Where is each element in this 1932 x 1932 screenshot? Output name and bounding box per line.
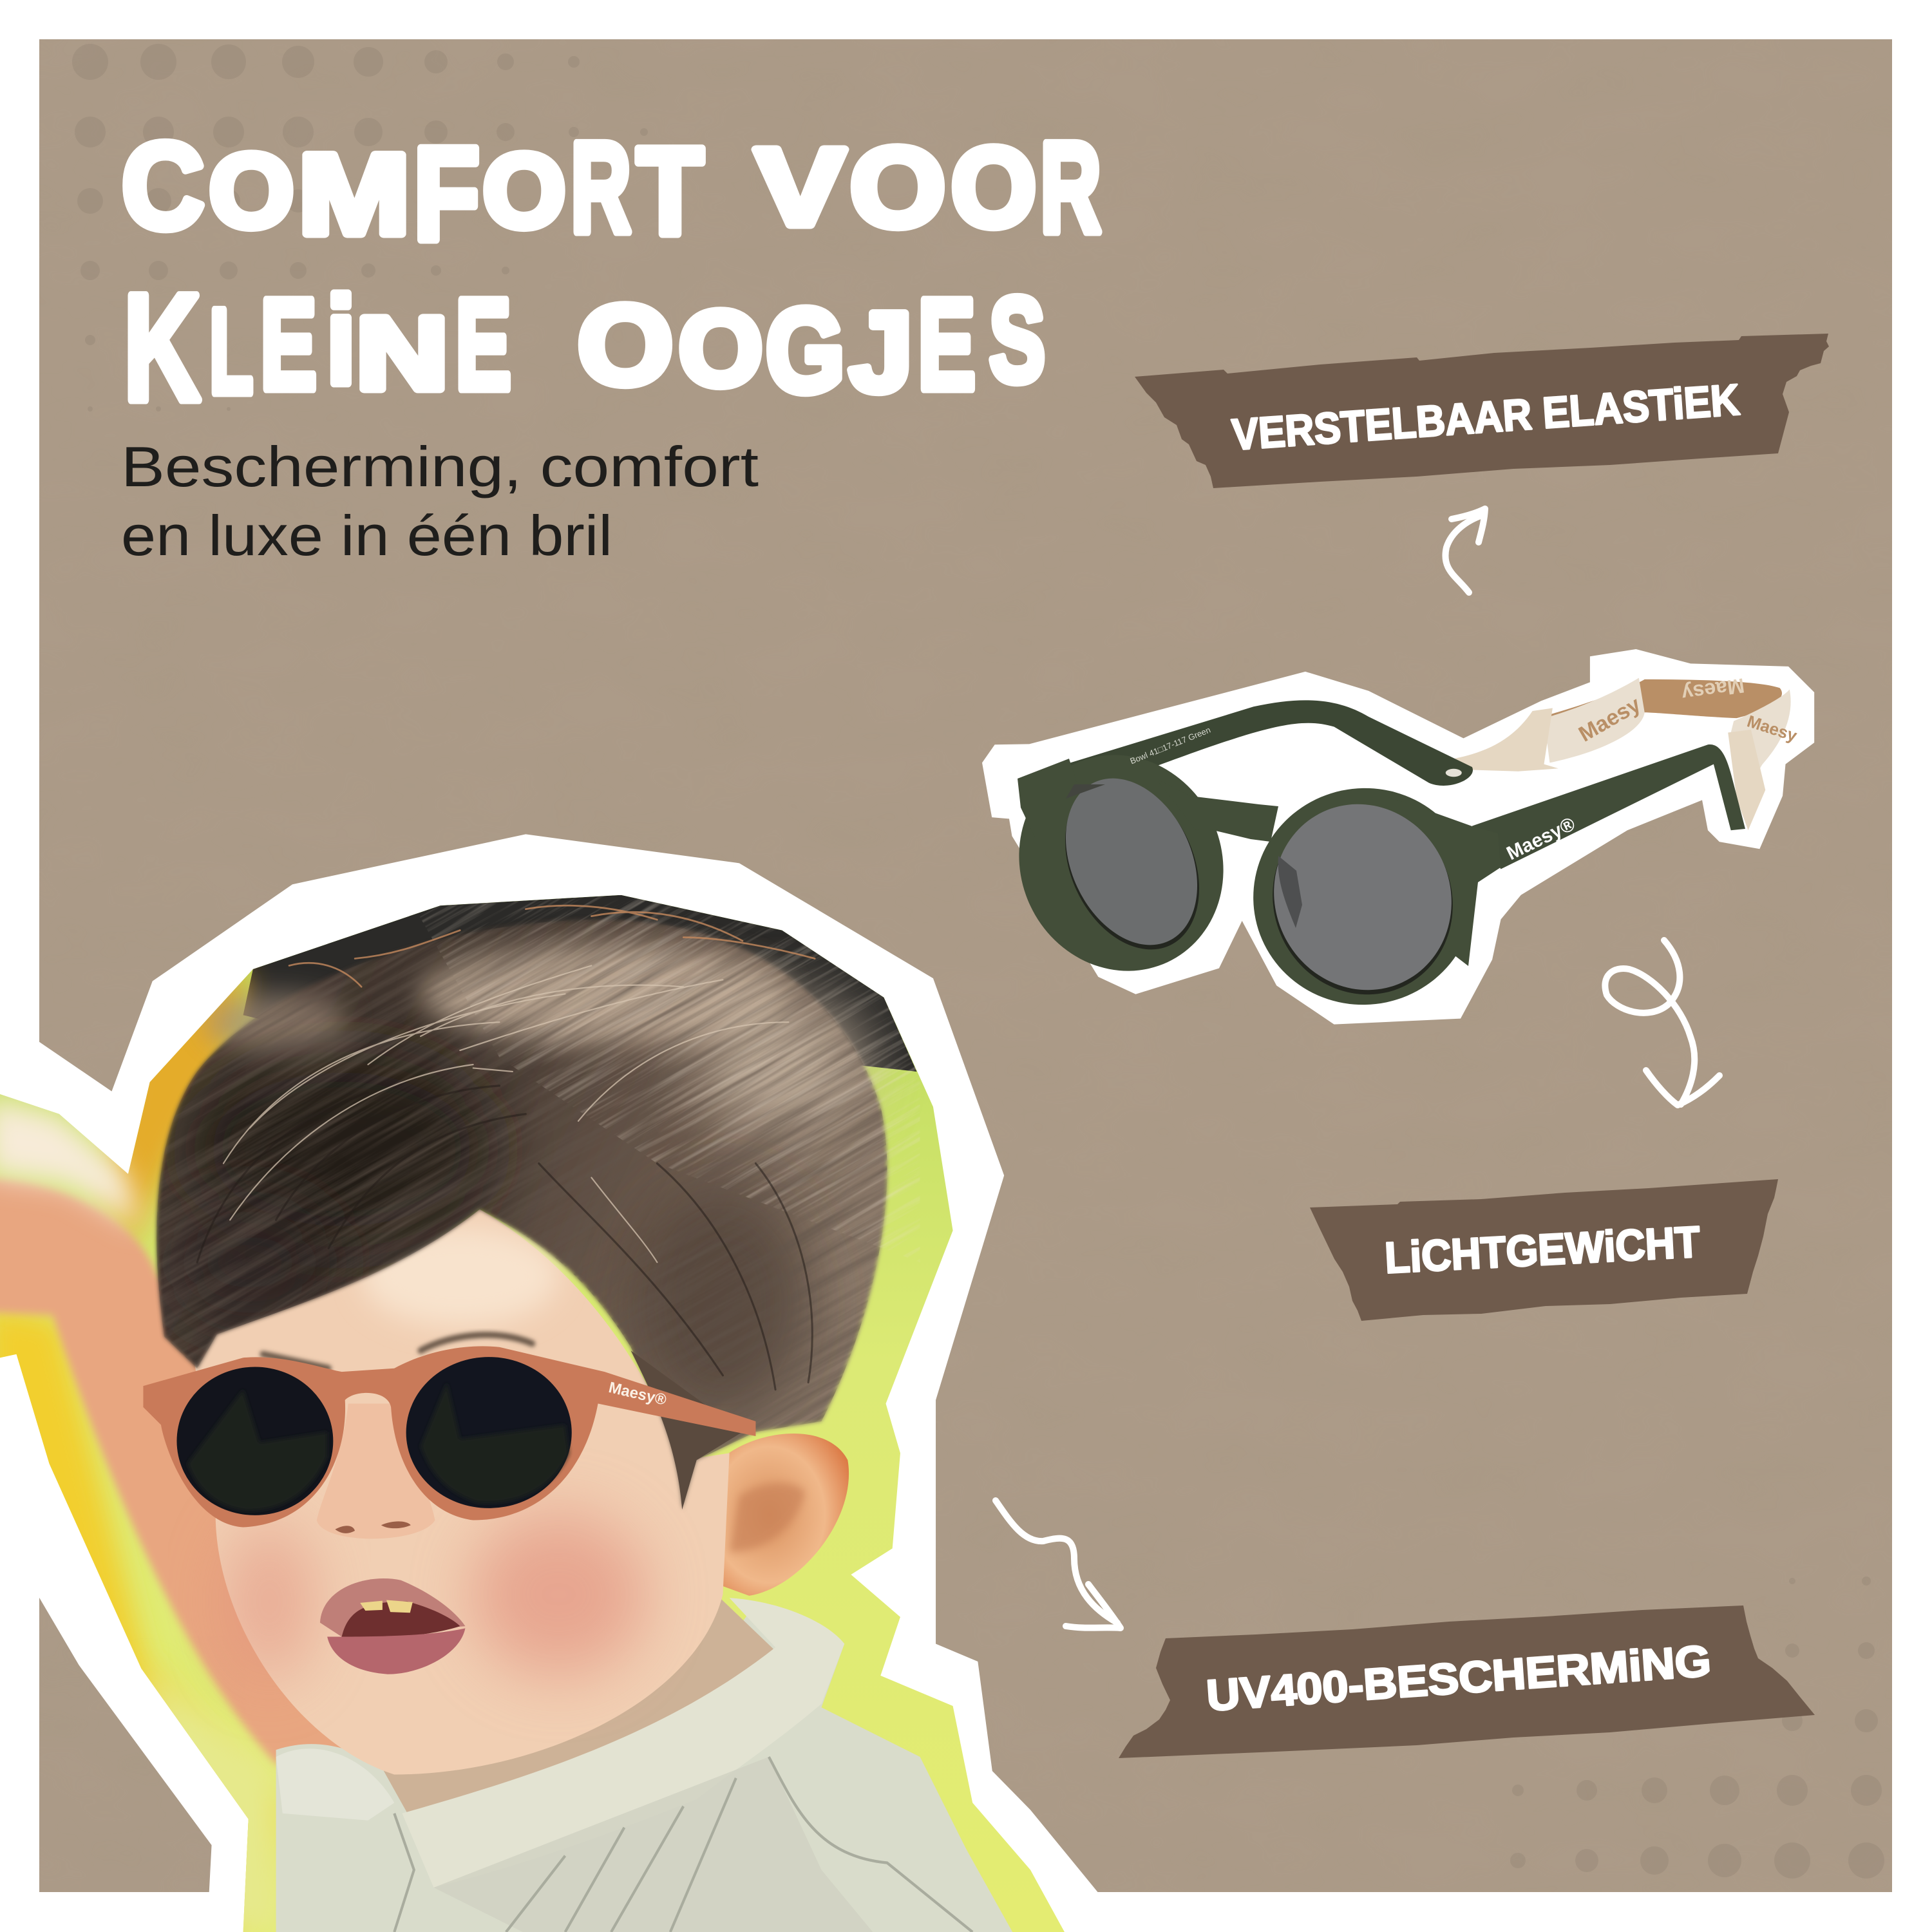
model text on temple: Bowl 41□17-117 Green [1129,725,1212,766]
mouth [320,1578,465,1674]
title: G [766,285,845,417]
hair strands [197,905,815,1390]
subtitle [121,435,759,567]
brand mark on orange glasses: Maesy® [607,1379,668,1409]
sideburn [631,1350,743,1510]
label: lichtgewicht: LiCHTGEWiCHT [1383,1217,1701,1283]
label: verstelbaar elastiek: VERSTELBAAR ELASTiEK [1230,375,1741,459]
sweater ribs [394,1757,972,1932]
title: E [260,272,317,417]
white cut-out outline [0,834,1103,1932]
product: green sunglasses with strap [982,649,1814,1025]
hair highlights [0,343,1403,1932]
near temple arm [1472,744,1745,869]
title: R [571,116,631,260]
halftone dots top left [72,44,648,412]
elastic strap [1455,678,1791,830]
label: uv400-bescherming [1119,1605,1815,1758]
title: V [755,126,845,249]
arrow: wavy to uv protection [996,1501,1121,1628]
yellow left backdrop [0,1305,276,1932]
title: J [849,290,913,415]
white left collar and sweater [276,1602,1025,1932]
title: O [209,133,294,249]
title: K [124,263,200,433]
halftone dots bottom right [1510,1577,1884,1879]
strap lettering [1575,674,1800,747]
title: O [951,125,1036,251]
back temple arm [1023,700,1473,786]
label: verstelbaar elastiek [1135,334,1829,488]
white cut-out outline [982,649,1814,1025]
subtitle: Bescherming, comfort [121,435,759,498]
label: lichtgewicht [1310,1179,1778,1321]
title: R [1040,116,1101,260]
blurred arm [0,1177,368,1764]
hair mass [156,920,887,1510]
nose [317,1404,435,1539]
title: i [327,271,355,410]
ear [716,1434,849,1596]
title: O [850,125,945,251]
hair texture [0,343,1403,1932]
title [122,116,1101,433]
title: M [298,130,410,258]
title: N [356,296,448,411]
green frame rims [984,721,1501,1025]
title: O [679,289,762,408]
brand mark on temple: Maesy® [1503,813,1578,864]
neck shadow [368,1595,775,1814]
orange sunglasses [143,1346,755,1528]
title: E [918,272,976,417]
arrow: loop to lightweight [1605,940,1719,1105]
photo: boy wearing sunglasses [0,834,1097,1932]
title: O [578,283,673,408]
arrow: up to elastic [1445,509,1485,592]
subtitle: en luxe in één bril [121,504,612,567]
label: uv400-bescherming: UV400-BESCHERMiNG [1205,1636,1712,1720]
title: O [483,133,565,249]
strap lettering: Maesy [1680,674,1746,706]
face [191,1209,730,1774]
left lens [1039,757,1225,971]
green backdrop [0,895,1117,1932]
title: F [413,120,480,268]
collar [402,1598,844,1888]
right lens [1242,775,1484,1024]
title: S [989,272,1045,407]
title: T [637,122,703,260]
strap lettering: Maesy [1575,692,1645,747]
strap lettering: Maesy [1745,711,1800,746]
dark tree line [243,895,916,1072]
title: C [122,118,204,254]
eyebrow [263,1335,533,1368]
title: E [455,272,511,417]
title: L [209,284,253,419]
